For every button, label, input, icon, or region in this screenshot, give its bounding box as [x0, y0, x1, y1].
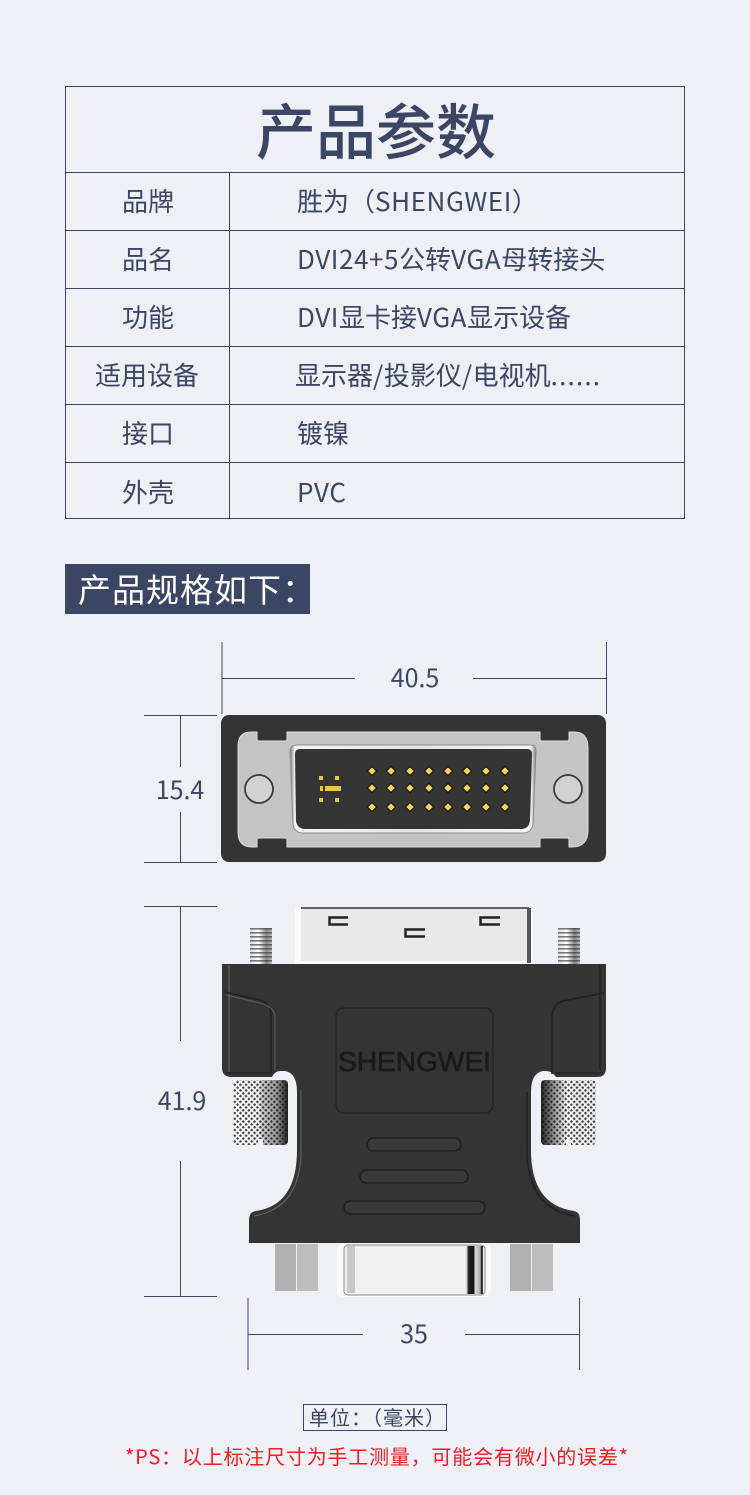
analog pins — [319, 776, 341, 802]
left screw hole — [245, 775, 273, 803]
D-shell insulator — [295, 749, 532, 829]
row: shell: 外壳 — [122, 473, 174, 510]
connector front view: DVI face — [221, 715, 606, 862]
grip ridge 3 — [344, 1201, 485, 1214]
dimension: length 41.9: 41.9 — [158, 1082, 206, 1118]
logo panel — [336, 1008, 493, 1113]
VGA metal shell — [337, 1244, 491, 1297]
24 digital pins — [368, 766, 510, 812]
body contour highlights — [229, 965, 301, 1216]
row: applicable devices — [95, 356, 601, 393]
VGA tabs — [275, 1244, 553, 1291]
row: product name: 品名 — [122, 240, 174, 277]
grip ridge 1 — [367, 1138, 461, 1151]
DVI metal plug — [295, 907, 533, 964]
row: function — [122, 298, 571, 335]
row: function: 功能 — [122, 298, 174, 335]
black body — [222, 964, 606, 1243]
row: applicable devices: 适用设备 — [95, 356, 199, 393]
row: applicable devices: 显示器/投影仪/电视机...... — [295, 356, 601, 393]
dimension: width 40.5 — [222, 642, 606, 714]
body contour lines — [225, 965, 604, 1216]
row: shell: PVC — [297, 473, 347, 510]
row: interface: 接口 — [122, 414, 174, 451]
row: product name: DVI24+5公转VGA母转接头 — [297, 240, 605, 277]
right screw hole — [554, 775, 582, 803]
dimension: width 35: 35 — [400, 1315, 428, 1351]
dimension: length 41.9 — [144, 906, 217, 1296]
dimension: width 35 — [248, 1298, 580, 1370]
adapter side view — [222, 907, 606, 1297]
contour highlight inner — [226, 995, 275, 1070]
table grid — [65, 86, 685, 518]
parameter table — [65, 85, 685, 518]
unit label: 单位：（毫米） — [309, 1402, 446, 1431]
dark faceplate — [221, 715, 606, 862]
row: brand: 胜为（SHENGWEI） — [297, 182, 538, 219]
dimension: height 15.4: 15.4 — [156, 771, 204, 807]
row: product name — [122, 240, 605, 277]
left knurled screw — [233, 1080, 288, 1146]
section heading: product specs: 产品规格如下： — [78, 564, 316, 612]
row: shell — [122, 473, 347, 510]
row: interface: 镀镍 — [297, 414, 349, 451]
dimension: width 40.5: 40.5 — [391, 659, 439, 695]
row: brand: 品牌 — [122, 182, 174, 219]
right thread screw — [558, 928, 580, 964]
grip ridge 2 — [360, 1170, 468, 1183]
row: function: DVI显卡接VGA显示设备 — [297, 298, 571, 335]
row: brand — [122, 182, 538, 219]
left thread screw — [250, 928, 272, 964]
measurement disclaimer: *PS：以上标注尺寸为手工测量，可能会有微小的误差* — [125, 1441, 629, 1470]
table title: 产品参数 — [256, 85, 496, 172]
dimension: height 15.4 — [144, 715, 217, 862]
logo text: SHENGWEI — [338, 1046, 491, 1077]
row: interface — [122, 414, 349, 451]
right knurled screw — [541, 1080, 596, 1146]
D-shell rim — [290, 745, 536, 833]
metal plate — [238, 732, 588, 847]
